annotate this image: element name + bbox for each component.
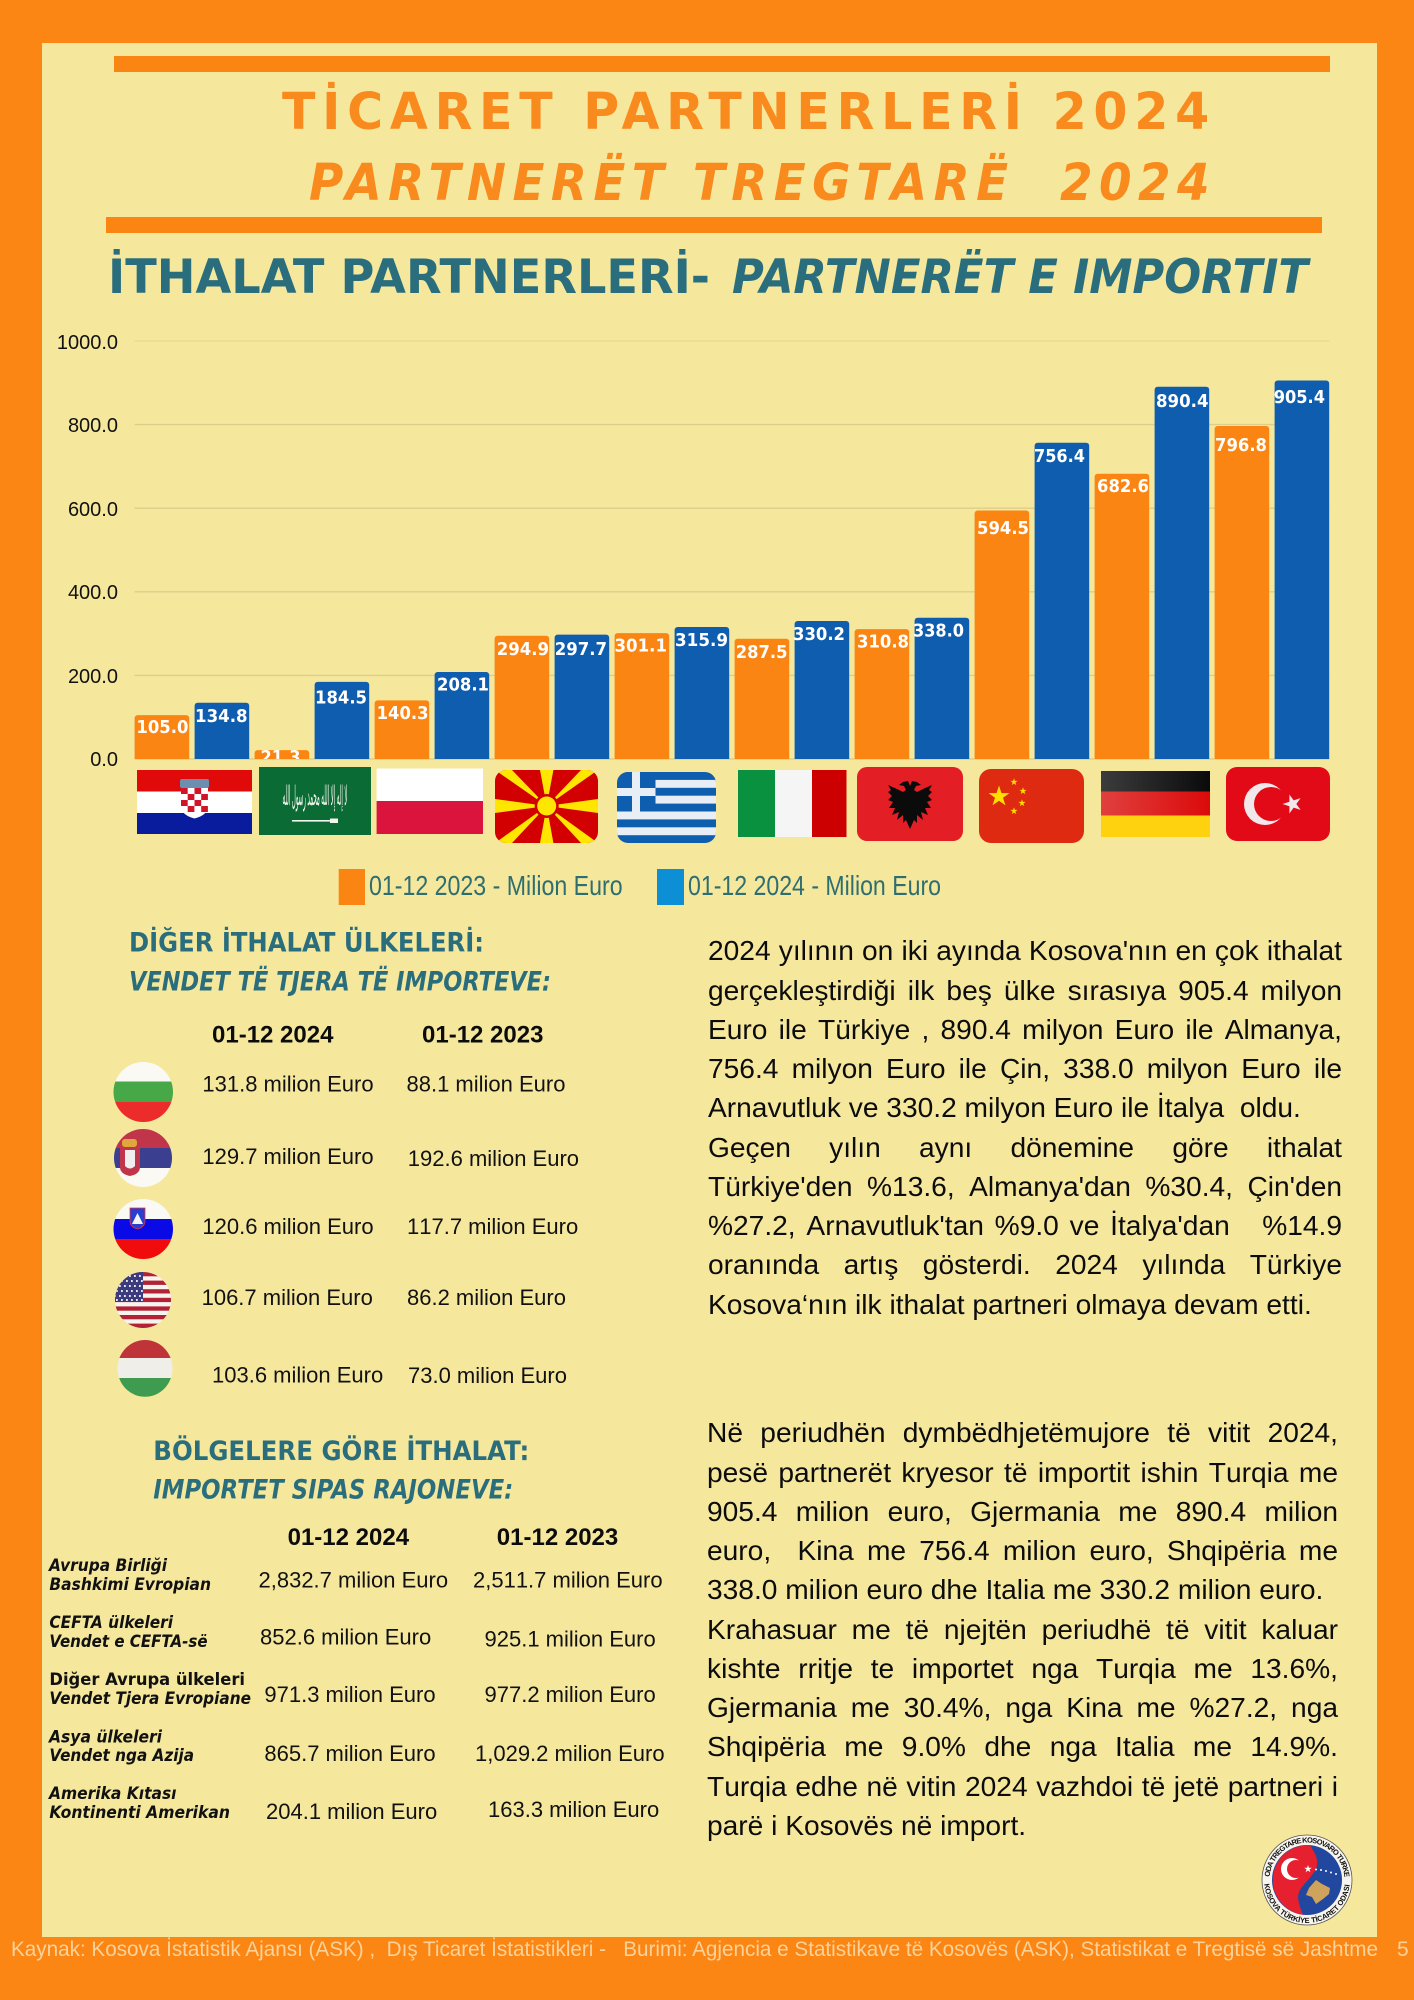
row: Hungary values: 103.6 milion Euro xyxy=(212,1363,383,1388)
row: European Union: 2,832.7 milion Euro xyxy=(258,1567,448,1592)
bars: Croatia: 105.0 xyxy=(136,717,188,738)
row: Slovenia values: 117.7 milion Euro xyxy=(407,1214,578,1239)
title: Albanian: PARTNERËT TREGTARË 2024 xyxy=(309,152,1216,213)
table: other import countries: 01-12 2023 xyxy=(422,1022,543,1049)
heading: imports by region: IMPORTET SIPAS RAJONEVE: xyxy=(153,1475,513,1506)
flag: Croatia xyxy=(137,770,252,834)
row: Americas: 163.3 milion Euro xyxy=(488,1797,659,1822)
row: Asia: Vendet nga Azija xyxy=(49,1746,194,1765)
footer: source line: Kaynak: Kosova İstatistik Ajansı (ASK) , Dış Ticaret İstatistikleri - Burimi: Agjencia e Statistikave të Kosovës (ASK), Statistikat e Tregtisë së Jashtme xyxy=(11,1938,1378,1961)
bars: Greece: 301.1 xyxy=(614,636,667,656)
text block: Turkish summary: %27.2, Arnavutluk'tan %9.0 ve İtalya'dan %14.9 xyxy=(708,1210,1342,1241)
text block: Albanian summary: parë i Kosovës në import. xyxy=(707,1810,1026,1841)
row: Other European countries xyxy=(49,1670,656,1708)
row: Other European countries: 977.2 milion Euro xyxy=(484,1682,656,1707)
row: USA values xyxy=(202,1285,566,1310)
bars: Italy: 330.2 xyxy=(793,624,845,645)
row: CEFTA xyxy=(49,1613,656,1652)
row: USA values: 86.2 milion Euro xyxy=(407,1285,566,1310)
heading: other import countries: VENDET TË TJERA TË IMPORTEVE: xyxy=(129,966,551,998)
text block: Turkish summary xyxy=(708,935,1342,1320)
heading: import partners: PARTNERËT E IMPORTIT xyxy=(732,250,1312,305)
heading: import partners: İTHALAT PARTNERLERİ- xyxy=(108,250,710,305)
row: Asia: 1,029.2 milion Euro xyxy=(475,1741,665,1766)
heading: other import countries: DİĞER İTHALAT ÜLKELERİ: xyxy=(129,926,484,959)
row: European Union: 2,511.7 milion Euro xyxy=(473,1567,663,1592)
row: Hungary values: 73.0 milion Euro xyxy=(408,1363,567,1388)
logo: Kosovo-Turkey chamber of commerce: KOSOVA TÜRKİYE TİCARET ODASI xyxy=(1264,1884,1350,1923)
flag circle: Slovenia xyxy=(114,1199,173,1259)
text: لا إله إلا الله محمد رسول الله xyxy=(282,781,348,812)
flag: Italy xyxy=(738,770,846,837)
table: other import countries xyxy=(110,1022,579,1399)
flag circle: Bulgaria xyxy=(114,1062,173,1122)
table: imports by region: 01-12 2024 xyxy=(288,1524,410,1551)
row: Serbia values: 192.6 milion Euro xyxy=(408,1146,579,1171)
text block: Albanian summary: 905.4 milion euro, Gjermania me 890.4 milion xyxy=(707,1496,1338,1527)
bars: Albania: 338.0 xyxy=(913,620,964,642)
heading: imports by region xyxy=(153,1434,529,1506)
text block: Turkish summary: gerçekleştirdiği ilk beş ülke sırasıya 905.4 milyon xyxy=(708,975,1342,1006)
text block: Turkish summary: oranında artış gösterdi. 2024 yılında Türkiye xyxy=(708,1249,1342,1280)
bars: Germany xyxy=(1095,387,1209,765)
text block: Albanian summary: Shqipëria me 9.0% dhe nga Italia me 14.9%. xyxy=(707,1731,1338,1762)
bars: China xyxy=(975,443,1089,765)
row: USA values: 106.7 milion Euro xyxy=(202,1285,373,1310)
row: Other European countries: Vendet Tjera Evropiane xyxy=(49,1689,251,1708)
text block: Turkish summary: 756.4 milyon Euro ile Çin, 338.0 milyon Euro ile xyxy=(708,1053,1342,1084)
row: Bulgaria values: 131.8 milion Euro xyxy=(202,1072,374,1097)
row: Bulgaria values xyxy=(202,1072,565,1097)
text block: Albanian summary: pesë partnerët kryesor të importit ishin Turqia me xyxy=(707,1457,1338,1488)
row: European Union: Bashkimi Evropian xyxy=(49,1575,211,1594)
legend xyxy=(339,869,941,905)
flag circle: USA xyxy=(115,1272,171,1328)
bars: Albania xyxy=(855,618,969,765)
bars: North Macedonia: 294.9 xyxy=(497,639,549,660)
bars: Greece xyxy=(614,627,729,765)
bar chart xyxy=(57,332,1330,771)
bars: Saudi Arabia: 21.3 xyxy=(260,747,300,768)
text block: Turkish summary: Kosova‘nın ilk ithalat partneri olmaya devam etti. xyxy=(708,1289,1312,1320)
heading: other import countries xyxy=(129,926,551,998)
bars: Saudi Arabia xyxy=(255,682,369,768)
text block: Turkish summary: Geçen yılın aynı dönemine göre ithalat xyxy=(708,1132,1342,1163)
text block: Turkish summary: 2024 yılının on iki ayında Kosova'nın en çok ithalat xyxy=(708,935,1342,966)
row: Serbia values xyxy=(202,1144,579,1171)
bars: Germany: 682.6 xyxy=(1097,476,1149,497)
row: Slovenia values xyxy=(202,1214,578,1239)
row: Asia: Asya ülkeleri xyxy=(47,1727,162,1746)
bars: Turkey: 796.8 xyxy=(1215,435,1267,456)
flag: North Macedonia xyxy=(495,770,598,843)
flag: Germany xyxy=(1101,771,1210,837)
row: Americas: Amerika Kıtası xyxy=(47,1784,177,1803)
bars: Saudi Arabia: 184.5 xyxy=(315,688,367,708)
y axis gridlines and labels: 0.0 xyxy=(90,749,118,771)
bars: Poland xyxy=(375,672,489,765)
text block: Albanian summary: Krahasuar me të njejtën periudhë të vitit kaluar xyxy=(707,1614,1338,1645)
y axis gridlines and labels: 600.0 xyxy=(68,499,118,521)
bars: Italy xyxy=(735,621,849,765)
flag: Turkey xyxy=(1226,767,1330,841)
flag: Saudi Arabia xyxy=(259,767,371,835)
bars: Italy: 287.5 xyxy=(736,642,788,663)
bars: Greece: 315.9 xyxy=(675,630,728,651)
row: Hungary values xyxy=(212,1363,567,1388)
logo: Kosovo-Turkey chamber of commerce xyxy=(1262,1834,1352,1926)
text block: Albanian summary: 338.0 milion euro dhe Italia me 330.2 milion euro. xyxy=(707,1574,1323,1605)
lower orange rule xyxy=(106,217,1322,233)
row: CEFTA: 852.6 milion Euro xyxy=(260,1624,431,1649)
row: European Union xyxy=(47,1556,663,1594)
row: Other European countries: 971.3 milion Euro xyxy=(264,1682,436,1707)
bars: Croatia xyxy=(135,703,249,765)
heading: import partners xyxy=(108,250,1312,305)
text block: Turkish summary: Arnavutluk ve 330.2 milyon Euro ile İtalya oldu. xyxy=(708,1092,1301,1123)
text block: Albanian summary: Turqia edhe në vitin 2024 vazhdoi të jetë partneri i xyxy=(707,1771,1338,1802)
top orange rule xyxy=(114,56,1330,72)
bars: China: 594.5 xyxy=(977,518,1029,539)
row: Other European countries: Diğer Avrupa ülkeleri xyxy=(49,1670,245,1689)
text block: Albanian summary: euro, Kina me 756.4 milion euro, Shqipëria me xyxy=(707,1535,1338,1566)
row: European Union: Avrupa Birliği xyxy=(47,1556,167,1575)
text block: Albanian summary: kishte rritje te importet nga Turqia me 13.6%, xyxy=(707,1653,1338,1684)
row: Americas xyxy=(47,1784,659,1824)
text block: Turkish summary: Türkiye'den %13.6, Almanya'dan %30.4, Çin'den xyxy=(708,1171,1342,1202)
bars: Turkey xyxy=(1215,380,1329,766)
y axis gridlines and labels: 1000.0 xyxy=(57,332,118,354)
row: Bulgaria values: 88.1 milion Euro xyxy=(406,1072,565,1097)
bars: Germany: 890.4 xyxy=(1156,391,1208,412)
text block: Turkish summary: Euro ile Türkiye , 890.4 milyon Euro ile Almanya, xyxy=(708,1014,1342,1045)
row: CEFTA: Vendet e CEFTA-së xyxy=(49,1632,208,1651)
flag circle: Serbia xyxy=(114,1129,172,1187)
flag: Greece xyxy=(617,772,716,843)
row: Americas: 204.1 milion Euro xyxy=(266,1799,437,1824)
bars: Poland: 208.1 xyxy=(437,674,489,696)
bars: Poland: 140.3 xyxy=(377,703,429,724)
table: other import countries: 01-12 2024 xyxy=(212,1022,334,1049)
y axis gridlines and labels: 200.0 xyxy=(68,666,118,688)
text block: Albanian summary: Në periudhën dymbëdhjetëmujore të vitit 2024, xyxy=(707,1417,1338,1448)
heading: imports by region: BÖLGELERE GÖRE İTHALAT: xyxy=(153,1434,529,1467)
table: imports by region: 01-12 2023 xyxy=(497,1524,618,1551)
flag: Albania xyxy=(857,767,963,841)
row: Slovenia values: 120.6 milion Euro xyxy=(202,1214,374,1239)
y axis gridlines and labels: 800.0 xyxy=(68,415,118,437)
row: Asia: 865.7 milion Euro xyxy=(264,1741,436,1766)
legend: 01-12 2024 - Milion Euro xyxy=(688,870,941,901)
legend: 01-12 2023 - Milion Euro xyxy=(369,870,623,901)
row: CEFTA: CEFTA ülkeleri xyxy=(49,1613,173,1632)
bars: Turkey: 905.4 xyxy=(1274,387,1325,408)
y axis gridlines and labels xyxy=(57,332,1330,771)
flag: China xyxy=(979,769,1084,843)
bars: North Macedonia xyxy=(495,635,609,766)
y axis gridlines and labels: 400.0 xyxy=(68,582,118,604)
row: Serbia values: 129.7 milion Euro xyxy=(202,1144,374,1169)
flag circle: Hungary xyxy=(118,1340,172,1397)
bars: North Macedonia: 297.7 xyxy=(555,639,607,660)
title: Turkish: TİCARET PARTNERLERİ 2024 xyxy=(282,81,1216,142)
bars: Croatia: 134.8 xyxy=(195,706,248,727)
footer: page number: 5 xyxy=(1397,1938,1409,1961)
flag: Poland xyxy=(377,768,483,834)
row: Asia xyxy=(47,1727,665,1766)
row: Americas: Kontinenti Amerikan xyxy=(49,1803,230,1822)
logo: Kosovo-Turkey chamber of commerce: ODA TREGTARE KOSOVARO TURKE xyxy=(1264,1837,1350,1877)
row: CEFTA: 925.1 milion Euro xyxy=(484,1627,656,1652)
table: imports by region xyxy=(47,1524,665,1824)
bars: China: 756.4 xyxy=(1034,446,1085,467)
text block: Albanian summary: Gjermania me 30.4%, nga Kina me %27.2, nga xyxy=(707,1692,1338,1723)
bars: Albania: 310.8 xyxy=(857,632,909,653)
text block: Albanian summary xyxy=(707,1417,1338,1841)
